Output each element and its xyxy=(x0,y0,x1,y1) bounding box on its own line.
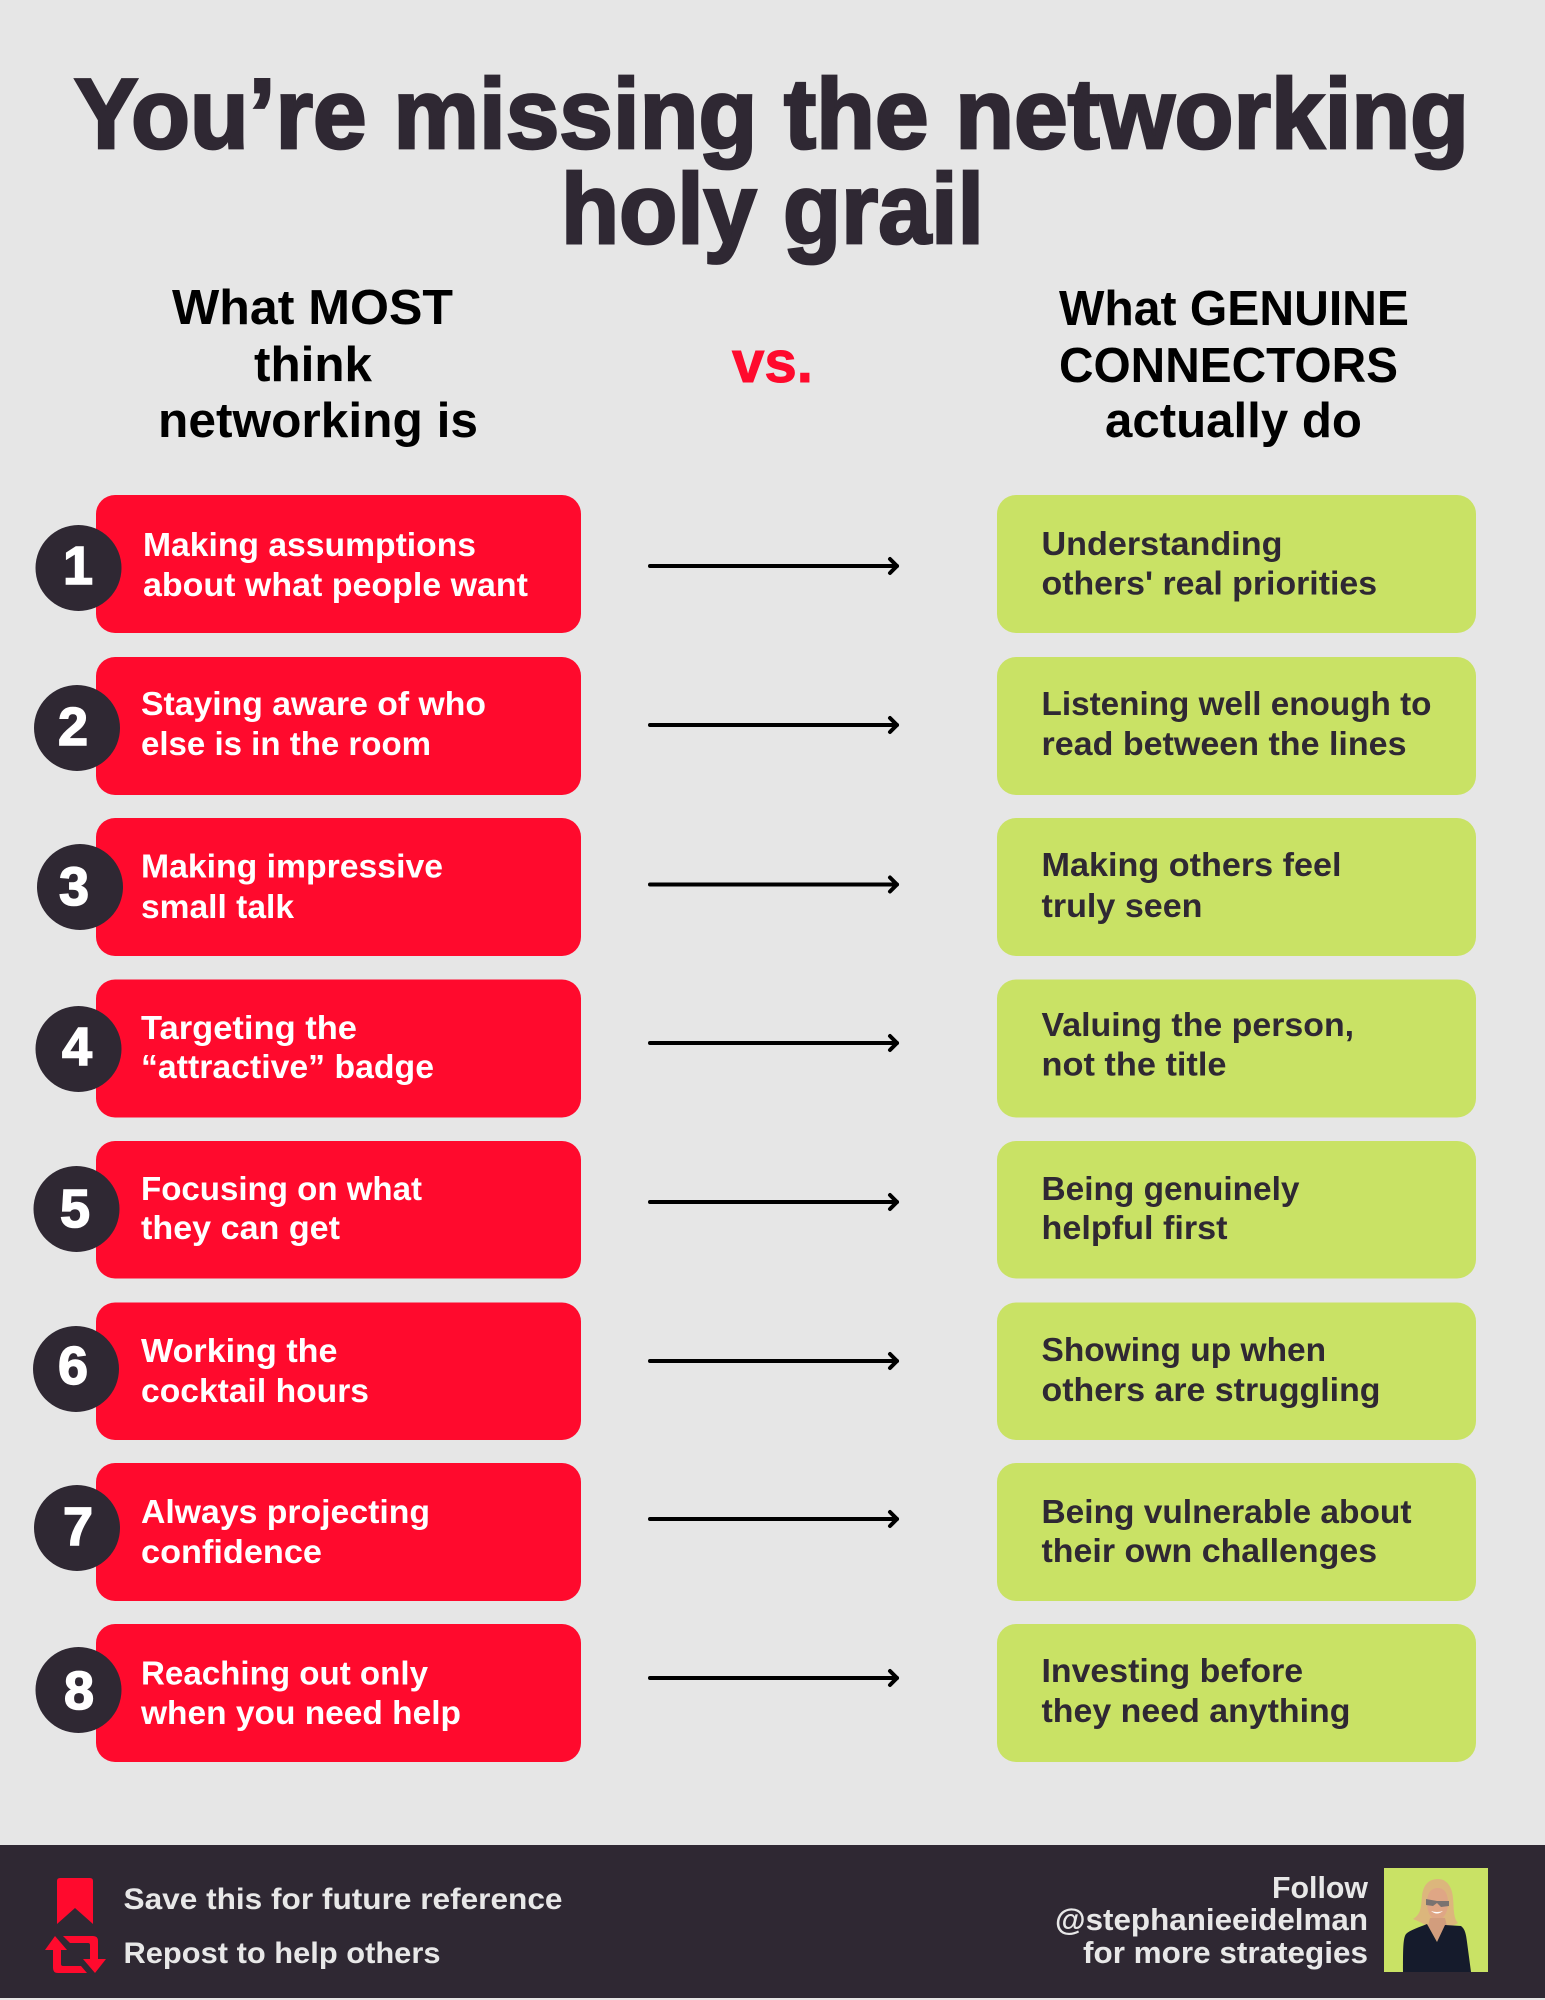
row 8 xyxy=(36,1624,1476,1762)
heading: what genuine connectors do xyxy=(1059,282,1409,448)
number badge 4 xyxy=(36,1006,122,1092)
red box 4 xyxy=(96,980,581,1118)
green box 4: not the title xyxy=(1042,1046,1226,1082)
icon: repost xyxy=(45,1936,106,1973)
green box 7 xyxy=(997,1463,1476,1601)
red box 8: Reaching out only xyxy=(141,1654,429,1692)
red box 3: Making impressive xyxy=(141,848,443,884)
red box 5: they can get xyxy=(141,1209,340,1246)
red box 4: “attractive” badge xyxy=(141,1048,434,1085)
green box 3: truly seen xyxy=(1042,887,1202,924)
heading: what most think: networking is xyxy=(158,394,478,448)
green box 5: Being genuinely xyxy=(1042,1170,1300,1207)
green box 6: others are struggling xyxy=(1042,1371,1380,1408)
row 2 xyxy=(34,657,1476,795)
red box 7: confidence xyxy=(141,1533,322,1570)
green box 7: Being vulnerable about xyxy=(1042,1493,1412,1530)
heading: what genuine connectors do: What GENUINE xyxy=(1059,282,1409,336)
red box 4: Targeting the xyxy=(141,1009,357,1046)
row 3 xyxy=(37,818,1476,956)
row 6 xyxy=(33,1302,1476,1440)
heading: what most think: What MOST xyxy=(172,281,453,335)
arrow 7 xyxy=(650,1512,897,1526)
text: follow xyxy=(1055,1870,1369,1970)
green box 5 xyxy=(997,1141,1476,1278)
arrow 4 xyxy=(650,1036,897,1050)
footer band xyxy=(0,1845,1545,1998)
red box 7: Always projecting xyxy=(141,1493,430,1530)
green box 8: they need anything xyxy=(1042,1692,1350,1729)
number badge 3: 3 xyxy=(59,857,89,917)
green box 1 xyxy=(997,495,1476,633)
number badge 5: 5 xyxy=(60,1179,90,1239)
number badge 7: 7 xyxy=(63,1497,93,1557)
number badge 1 xyxy=(36,525,122,611)
green box 4: Valuing the person, xyxy=(1042,1006,1354,1043)
number badge 3 xyxy=(37,844,123,930)
red box 7 xyxy=(96,1463,581,1601)
red box 6: cocktail hours xyxy=(141,1372,369,1409)
number badge 6: 6 xyxy=(58,1336,88,1396)
red box 1 xyxy=(96,495,581,633)
arrow 5 xyxy=(650,1195,897,1209)
red box 8: when you need help xyxy=(140,1694,461,1731)
green box 3 xyxy=(997,818,1476,956)
green box 2: Listening well enough to xyxy=(1042,685,1432,722)
red box 6 xyxy=(96,1302,581,1440)
title xyxy=(74,58,1469,264)
green box 1: others' real priorities xyxy=(1042,564,1377,602)
number badge 5 xyxy=(34,1166,120,1252)
green box 2 xyxy=(997,657,1476,795)
text: save: Save this for future reference xyxy=(124,1883,562,1916)
row 7 xyxy=(34,1463,1476,1601)
green box 8: Investing before xyxy=(1042,1652,1303,1689)
arrow 3 xyxy=(650,878,897,892)
text: follow: Follow xyxy=(1272,1870,1369,1905)
number badge 8 xyxy=(36,1647,122,1733)
number badge 7 xyxy=(34,1485,120,1571)
red box 5 xyxy=(96,1141,581,1278)
heading: what most think xyxy=(158,281,478,448)
number badge 6 xyxy=(33,1326,119,1412)
green box 2: read between the lines xyxy=(1042,725,1406,762)
heading: vs.: vs. xyxy=(732,330,813,395)
red box 1: about what people want xyxy=(143,566,528,603)
number badge 4: 4 xyxy=(62,1017,92,1077)
text: follow: for more strategies xyxy=(1083,1935,1368,1970)
text: repost: Repost to help others xyxy=(124,1937,441,1970)
green box 5: helpful first xyxy=(1042,1209,1228,1246)
red box 6: Working the xyxy=(141,1332,338,1369)
heading: what most think: think xyxy=(254,338,373,392)
arrow 1 xyxy=(650,559,897,573)
red box 3: small talk xyxy=(141,888,295,925)
text: follow: @stephanieeidelman xyxy=(1055,1902,1368,1937)
author portrait xyxy=(1384,1868,1488,1972)
green box 6: Showing up when xyxy=(1042,1331,1326,1368)
arrow 2 xyxy=(650,718,897,732)
heading: what genuine connectors do: actually do xyxy=(1105,394,1362,448)
number badge 8: 8 xyxy=(64,1661,94,1721)
row 1 xyxy=(36,495,1476,633)
number badge 2: 2 xyxy=(58,697,88,757)
red box 2 xyxy=(96,657,581,795)
green box 4 xyxy=(997,980,1476,1118)
red box 3 xyxy=(96,818,581,956)
arrow 8 xyxy=(650,1671,897,1685)
icon: bookmark xyxy=(57,1878,93,1924)
red box 1: Making assumptions xyxy=(143,526,476,563)
title: You’re missing the networking xyxy=(74,58,1469,169)
row 5 xyxy=(34,1141,1476,1278)
green box 1: Understanding xyxy=(1042,525,1282,562)
red box 5: Focusing on what xyxy=(141,1170,422,1207)
red box 2: Staying aware of who xyxy=(141,685,486,722)
red box 8 xyxy=(96,1624,581,1762)
number badge 2 xyxy=(34,685,120,771)
green box 8 xyxy=(997,1624,1476,1762)
green box 6 xyxy=(997,1302,1476,1440)
row 4 xyxy=(36,980,1476,1118)
heading: what genuine connectors do: CONNECTORS xyxy=(1059,339,1398,393)
red box 2: else is in the room xyxy=(141,725,431,762)
arrow 6 xyxy=(650,1354,897,1368)
number badge 1: 1 xyxy=(63,536,93,596)
title: holy grail xyxy=(561,153,984,264)
green box 3: Making others feel xyxy=(1042,846,1342,883)
green box 7: their own challenges xyxy=(1042,1532,1377,1569)
